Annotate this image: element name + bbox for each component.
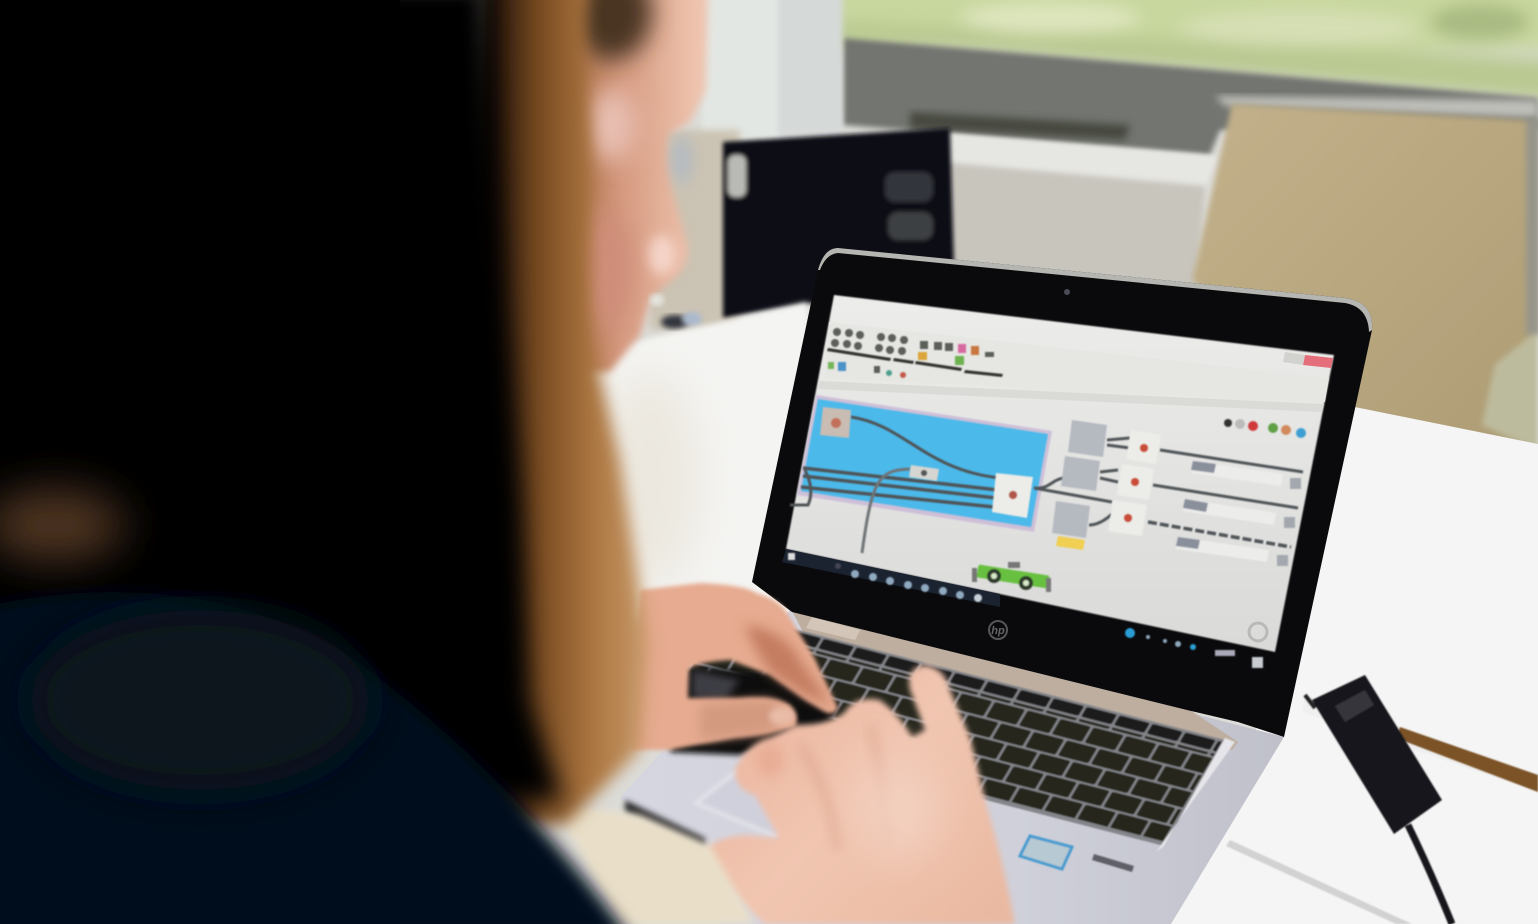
background room xyxy=(400,0,1538,924)
dark window sill band xyxy=(843,38,1538,155)
lid bezel xyxy=(752,248,1372,737)
program nodes xyxy=(820,407,1161,538)
screen xyxy=(786,295,1334,652)
radiator ledge xyxy=(945,133,1218,188)
hinge strip xyxy=(792,611,1238,750)
woman's hair and shoulder xyxy=(0,0,648,924)
slider panels xyxy=(1176,461,1301,566)
green node cluster xyxy=(972,562,1051,592)
blonde outer hair xyxy=(440,0,648,825)
wall pillar left xyxy=(702,0,782,150)
ribbon of toolbar xyxy=(825,322,1329,402)
warm hair glow left xyxy=(0,489,125,561)
icon: hp logo xyxy=(989,621,1007,639)
window close button xyxy=(1303,355,1333,368)
hands xyxy=(630,583,1015,924)
woman's face blurred xyxy=(540,0,708,372)
right hand knuckle shading xyxy=(800,745,838,850)
keyboard xyxy=(664,611,1235,852)
base front-left shadow xyxy=(625,800,705,850)
small colored gem icons xyxy=(1224,419,1306,438)
laptop base xyxy=(620,610,1284,924)
navy sweater xyxy=(0,592,632,924)
dark shadow between the hands xyxy=(670,668,840,755)
laptop xyxy=(620,248,1372,924)
icon: hp logo: hp xyxy=(991,625,1005,637)
taskbar xyxy=(782,549,1000,607)
canvas blue group xyxy=(797,395,1052,532)
chair xyxy=(1192,104,1538,460)
trackpad xyxy=(696,772,850,836)
toolbar strips xyxy=(827,348,1003,377)
dark hair xyxy=(0,0,562,800)
beige wall behind the face xyxy=(650,130,740,330)
webcam xyxy=(1064,289,1070,295)
black cable adapter xyxy=(1305,675,1452,924)
left hand xyxy=(630,583,838,750)
left hand finger shade xyxy=(745,625,832,706)
toolbar icons xyxy=(828,328,994,378)
left thumb nail xyxy=(769,707,795,725)
window greenery xyxy=(835,0,1538,100)
eyebrow and dark hair at the temple xyxy=(572,0,652,60)
table xyxy=(590,302,1538,924)
blurred cream sleeve xyxy=(555,805,755,924)
wires xyxy=(790,417,1303,553)
black cabinet xyxy=(723,128,955,318)
canvas corner widget xyxy=(1249,623,1267,641)
lid top edge highlight xyxy=(818,248,1372,332)
small blurred objects behind the nose xyxy=(661,315,689,329)
processor sticker xyxy=(1020,836,1072,869)
right hand xyxy=(703,665,1015,924)
